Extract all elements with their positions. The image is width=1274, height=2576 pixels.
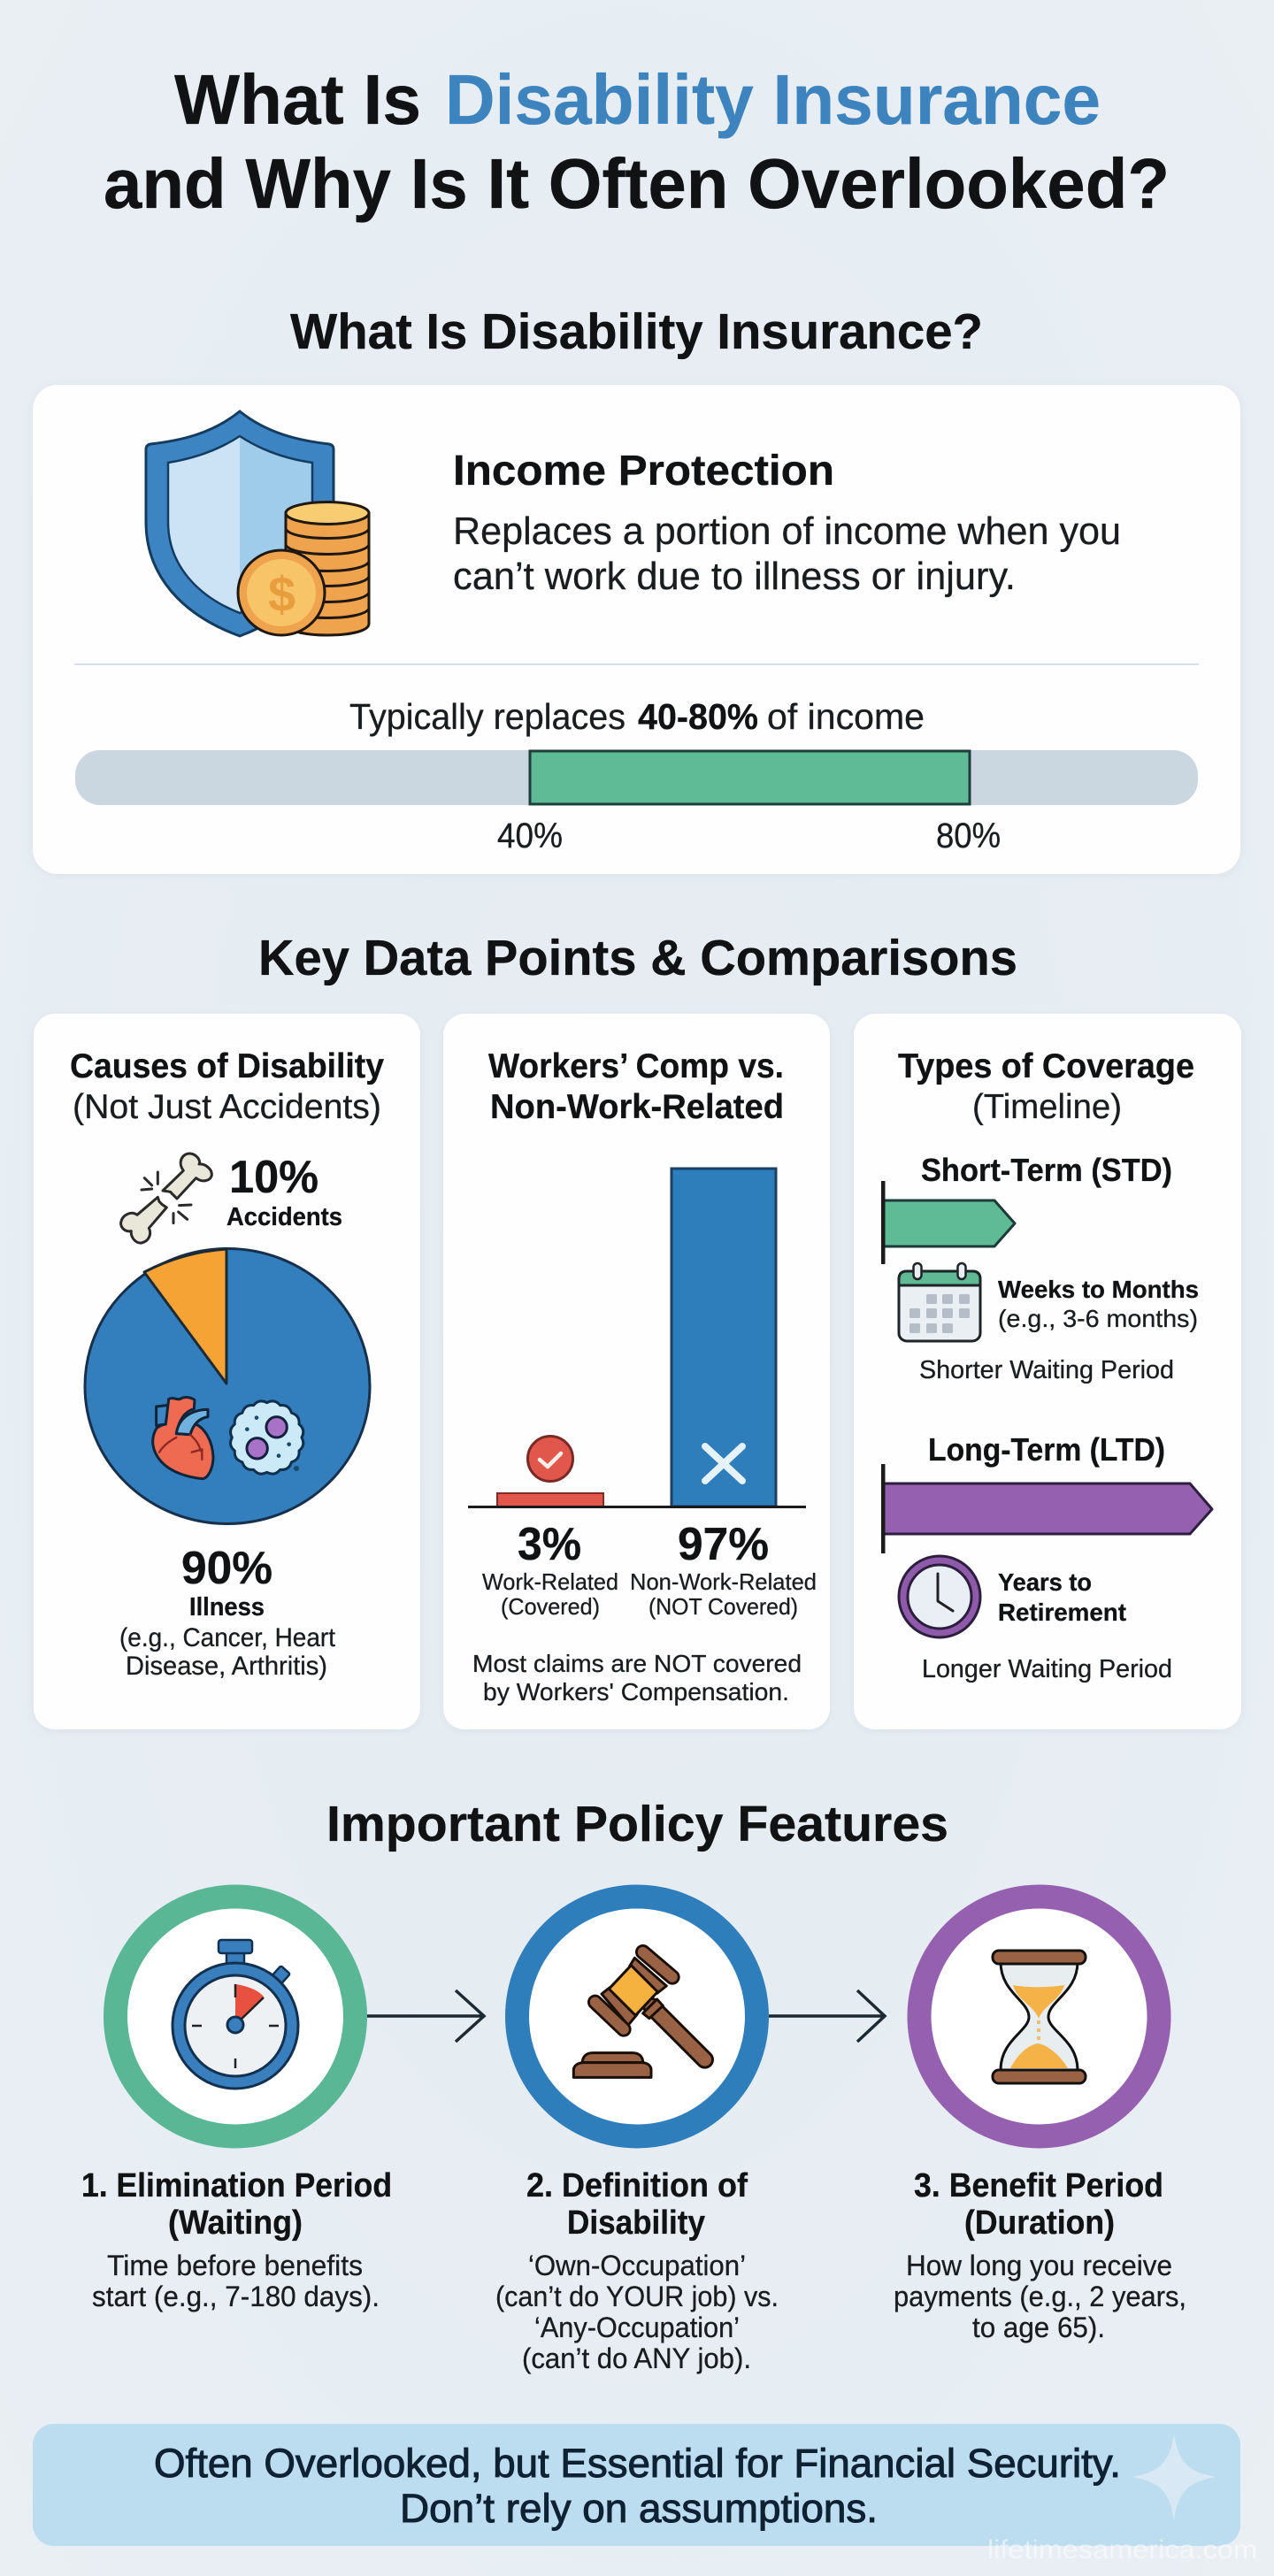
feature 3 description: to age 65). bbox=[972, 2312, 1105, 2343]
feature 3 heading: 3. Benefit Period bbox=[914, 2167, 1163, 2204]
caption: typical replacement: Typically replaces bbox=[349, 696, 625, 737]
banner text: Often Overlooked, but Essential for Financial Security. bbox=[154, 2441, 1121, 2486]
stat: 3% work-related: Work-Related bbox=[482, 1568, 618, 1595]
feature 1 heading: 1. Elimination Period bbox=[81, 2167, 392, 2204]
long-term duration text bbox=[998, 1568, 1126, 1626]
stat: 3% work-related: 3% bbox=[518, 1519, 581, 1570]
stat: 90% illness bbox=[119, 1543, 336, 1681]
banner text: Don’t rely on assumptions. bbox=[400, 2486, 878, 2531]
icon: cross mark bbox=[705, 1446, 742, 1481]
panel: income protection bbox=[33, 385, 1240, 874]
stat: 3% work-related bbox=[482, 1519, 618, 1620]
icon: clock bbox=[899, 1556, 980, 1637]
stat: 90% illness: (e.g., Cancer, Heart bbox=[119, 1623, 336, 1652]
short-term note: Shorter Waiting Period bbox=[919, 1356, 1174, 1384]
icon: heart bbox=[153, 1398, 213, 1479]
panel: types of coverage bbox=[854, 1014, 1241, 1729]
title: What Is bbox=[174, 60, 421, 139]
feature 1 description: start (e.g., 7-180 days). bbox=[92, 2281, 380, 2312]
icon: sparkle bbox=[1132, 2434, 1216, 2520]
watermark: lifetimesamerica.com bbox=[987, 2535, 1257, 2564]
stat: 97% non-work-related: Non-Work-Related bbox=[630, 1568, 817, 1595]
feature 2 description: ‘Own-Occupation’ bbox=[528, 2250, 746, 2281]
heading: what is disability insurance: What Is Disability Insurance? bbox=[290, 303, 983, 360]
panel heading: (Not Just Accidents) bbox=[73, 1088, 381, 1126]
short-term duration text: (e.g., 3-6 months) bbox=[998, 1305, 1198, 1332]
feature 3: benefit period bbox=[894, 1897, 1186, 2343]
panel heading: Non-Work-Related bbox=[490, 1088, 784, 1126]
stat: 97% non-work-related: 97% bbox=[678, 1519, 769, 1570]
icon: gavel badge bbox=[517, 1897, 757, 2136]
short-term duration text: Weeks to Months bbox=[998, 1276, 1199, 1303]
icon: calendar bbox=[899, 1263, 980, 1341]
panel: causes of disability bbox=[34, 1014, 420, 1729]
description text: Replaces a portion of income when you bbox=[453, 510, 1121, 553]
range bar 40-80%: 40% bbox=[497, 816, 563, 855]
description text bbox=[453, 510, 1121, 598]
stat: 10% accidents bbox=[226, 1152, 342, 1231]
panel heading: Workers’ Comp vs. bbox=[488, 1047, 784, 1085]
icon: broken bone bbox=[121, 1154, 211, 1243]
note text bbox=[472, 1650, 802, 1706]
icon: hourglass badge bbox=[919, 1897, 1159, 2136]
panel heading: Types of Coverage bbox=[898, 1047, 1194, 1085]
caption: typical replacement: of income bbox=[767, 696, 925, 737]
feature 2 description: (can’t do ANY job). bbox=[522, 2342, 751, 2374]
heading: key data points: Key Data Points & Comparisons bbox=[258, 930, 1017, 986]
banner: conclusion bbox=[33, 2424, 1240, 2546]
subheading: long-term: Long-Term (LTD) bbox=[928, 1431, 1165, 1468]
long-term note: Longer Waiting Period bbox=[922, 1655, 1172, 1683]
note text: Most claims are NOT covered bbox=[472, 1650, 802, 1677]
long-term duration text: Retirement bbox=[998, 1598, 1126, 1626]
title bbox=[104, 60, 1170, 223]
bar chart: 3% vs 97% bbox=[468, 1169, 806, 1508]
feature 2 description: (can’t do YOUR job) vs. bbox=[495, 2281, 779, 2312]
note text: by Workers' Compensation. bbox=[483, 1678, 789, 1706]
caption: typical replacement bbox=[349, 696, 925, 737]
panel heading bbox=[898, 1047, 1194, 1126]
icon: shield with coins: $ bbox=[268, 566, 295, 622]
feature 2 heading bbox=[526, 2167, 748, 2242]
panel: workers comp comparison bbox=[443, 1014, 830, 1729]
stat: 97% non-work-related bbox=[630, 1519, 817, 1620]
icon: cell bbox=[230, 1401, 303, 1474]
panel heading bbox=[70, 1047, 384, 1126]
banner text bbox=[154, 2441, 1121, 2531]
feature 3 description bbox=[894, 2250, 1186, 2343]
feature 2 heading: 2. Definition of bbox=[526, 2167, 748, 2204]
range bar 40-80%: 80% bbox=[936, 816, 1001, 855]
heading: policy features: Important Policy Features bbox=[326, 1796, 948, 1852]
feature 1: elimination period bbox=[81, 1897, 392, 2312]
arrow: feature 2 to 3 bbox=[769, 1990, 885, 2042]
feature 1 description: Time before benefits bbox=[107, 2250, 363, 2281]
feature 3 heading: (Duration) bbox=[964, 2204, 1115, 2242]
feature 2 description bbox=[495, 2250, 779, 2374]
arrow: feature 1 to 2 bbox=[367, 1990, 484, 2042]
panel heading bbox=[488, 1047, 784, 1126]
feature 1 heading bbox=[81, 2167, 392, 2242]
stat: 90% illness: 90% bbox=[181, 1543, 272, 1594]
icon: shield with coins bbox=[146, 411, 369, 636]
feature 3 heading bbox=[914, 2167, 1163, 2242]
stat: 10% accidents: 10% bbox=[229, 1152, 318, 1203]
feature 2 heading: Disability bbox=[567, 2204, 705, 2242]
stat: 90% illness: Illness bbox=[189, 1593, 265, 1622]
subheading: short-term: Short-Term (STD) bbox=[921, 1152, 1172, 1188]
stat: 3% work-related: (Covered) bbox=[501, 1593, 600, 1620]
stat: 97% non-work-related: (NOT Covered) bbox=[649, 1593, 798, 1620]
short-term duration text bbox=[998, 1276, 1199, 1332]
subheading: income protection: Income Protection bbox=[453, 448, 834, 494]
panel heading: Causes of Disability bbox=[70, 1047, 384, 1085]
arrow: long-term timeline bbox=[881, 1464, 1212, 1553]
feature 2 description: ‘Any-Occupation’ bbox=[534, 2312, 740, 2343]
icon: check badge bbox=[527, 1437, 573, 1481]
pie chart: 90% illness, 10% accidents bbox=[85, 1249, 370, 1523]
stat: 10% accidents: Accidents bbox=[226, 1203, 342, 1231]
feature 3 description: payments (e.g., 2 years, bbox=[894, 2281, 1186, 2312]
description text: can’t work due to illness or injury. bbox=[453, 555, 1016, 598]
icon: stopwatch badge bbox=[115, 1897, 356, 2136]
caption: typical replacement: 40-80% bbox=[638, 696, 758, 737]
feature 2: definition of disability bbox=[495, 1897, 779, 2374]
feature 1 description bbox=[92, 2250, 380, 2312]
title: and Why Is It Often Overlooked? bbox=[104, 144, 1170, 223]
title: Disability Insurance bbox=[445, 60, 1101, 139]
long-term duration text: Years to bbox=[998, 1568, 1092, 1596]
range bar 40-80% bbox=[75, 750, 1198, 855]
arrow: short-term timeline bbox=[881, 1181, 1015, 1264]
panel heading: (Timeline) bbox=[972, 1088, 1122, 1126]
feature 1 heading: (Waiting) bbox=[168, 2204, 303, 2242]
feature 3 description: How long you receive bbox=[906, 2250, 1172, 2281]
stat: 90% illness: Disease, Arthritis) bbox=[126, 1652, 327, 1681]
